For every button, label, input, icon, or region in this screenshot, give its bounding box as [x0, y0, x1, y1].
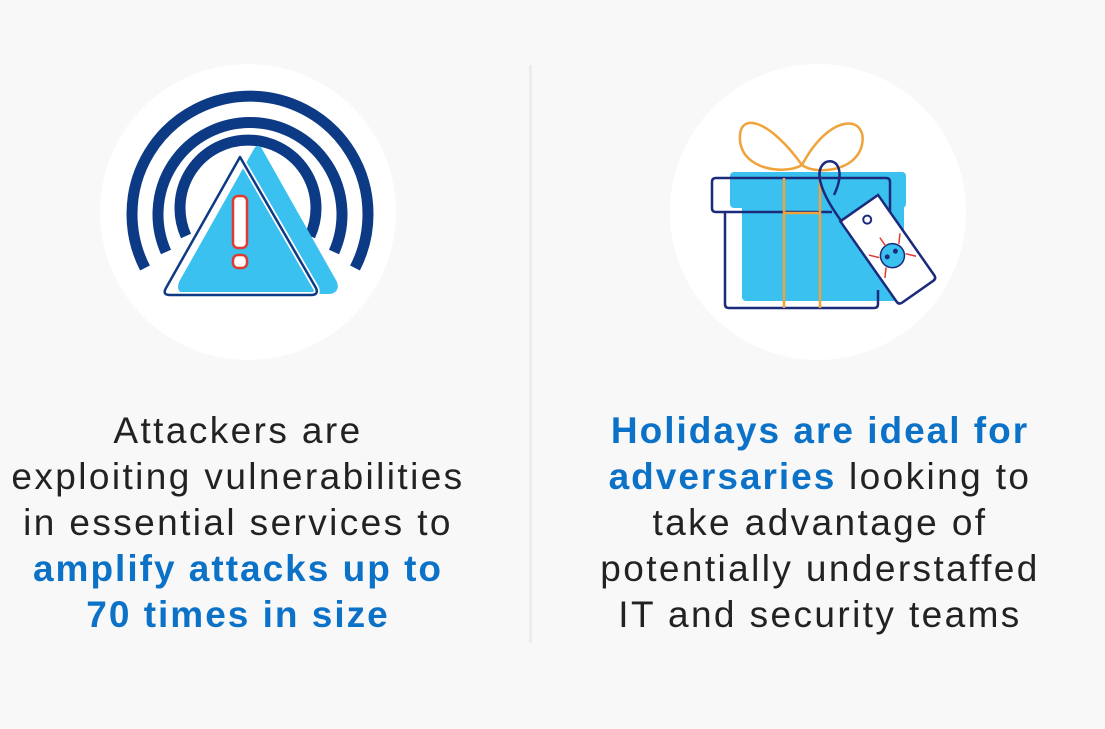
text: right panel: IT and security teams — [618, 594, 1022, 635]
text: left panel: 70 times in size — [86, 594, 390, 635]
text: left panel: exploiting vulnerabilities — [11, 456, 465, 497]
text: left panel — [11, 410, 465, 635]
text: right panel: take advantage of — [652, 502, 987, 543]
text: left panel: Attackers are — [113, 410, 363, 451]
text: right panel: potentially understaffed — [600, 548, 1040, 589]
text: left panel: in essential services to — [23, 502, 453, 543]
divider — [529, 65, 532, 643]
text: right panel — [600, 410, 1040, 635]
text: left panel: amplify attacks up to — [33, 548, 443, 589]
text: right panel: Holidays are ideal for — [611, 410, 1029, 451]
text: right panel: adversaries looking to — [609, 456, 1031, 497]
